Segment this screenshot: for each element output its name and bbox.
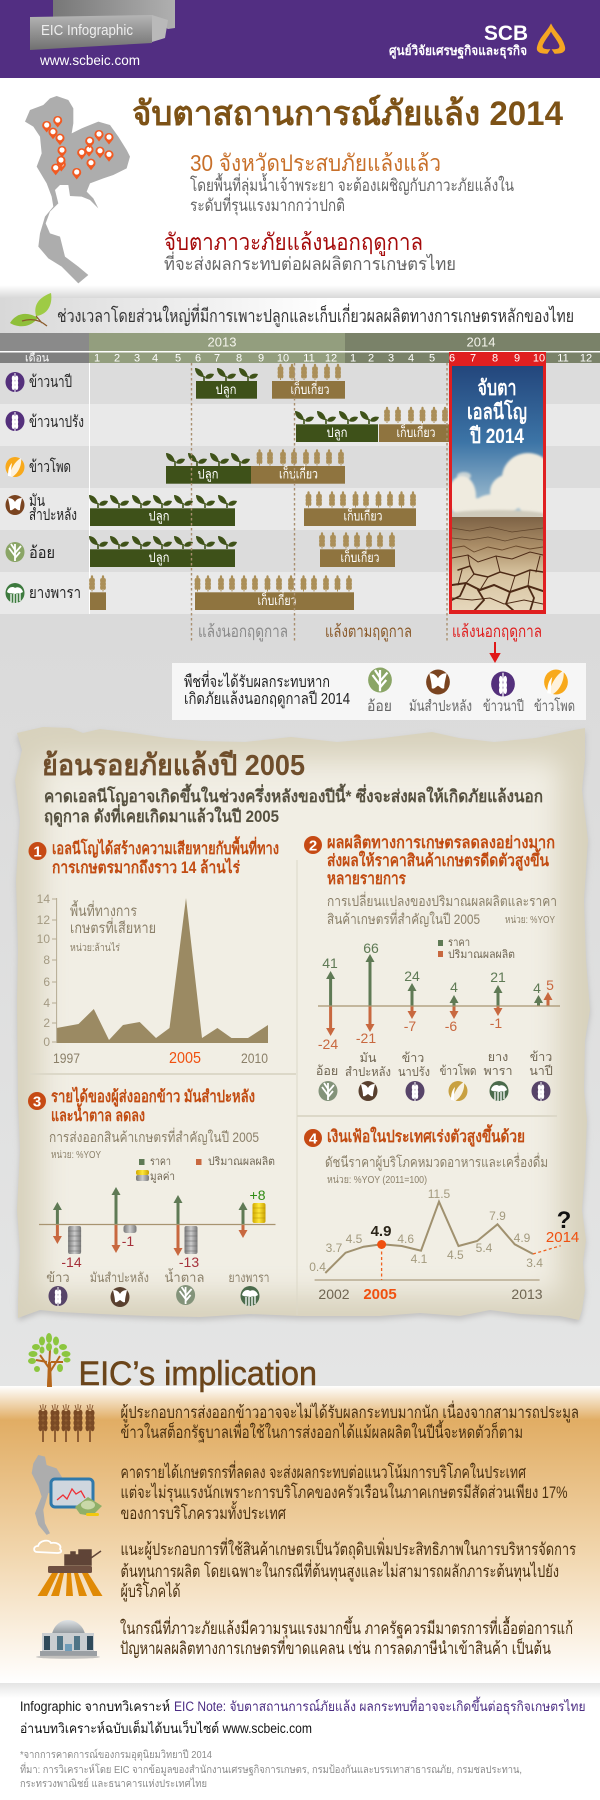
panel 1 heading [52, 836, 279, 877]
panel: El Nino watch photo: ปี 2014 [469, 424, 524, 448]
timeline header: 11 [303, 352, 315, 364]
timeline header: 2 [114, 352, 120, 364]
season labels: แล้งตามฤดูกาล [325, 622, 412, 642]
arrow chart: price and output: -6 [445, 1018, 457, 1034]
panel: El Nino watch photo: 8 [492, 352, 498, 364]
crop calendar: sugar cane: ปลูก [148, 550, 170, 566]
arrow chart: export value: น้ำตาล [165, 1268, 204, 1285]
timeline header: 4 [408, 352, 414, 364]
number badge 4: 4 [309, 1130, 318, 1148]
arrow: down to affected crops [491, 642, 499, 661]
row labels with crop icons: มัน [29, 493, 45, 510]
panel: torn paper 2005 drought [15, 727, 590, 1323]
arrow chart: export value: มันสำปะหลัง [90, 1270, 149, 1285]
intro paragraph [44, 783, 543, 828]
SCB logo text [389, 22, 528, 60]
timeline header: 2014 [467, 334, 495, 350]
footnotes: *จากการคาดการณ์ของกรมอุตุนิยมวิทยาปี 2014 [20, 1748, 212, 1761]
footnotes: กระทรวงพาณิชย์ และธนาคารแห่งประเทศไทย [20, 1777, 207, 1790]
panel 3: exporters income [28, 1086, 276, 1307]
area chart: damaged farmland: 2005 [169, 1050, 201, 1067]
crop calendar: corn: ปลูก [198, 466, 218, 482]
legend: ราคา [448, 937, 470, 949]
timeline header: 3 [388, 352, 394, 364]
arrow chart: price and output: -21 [356, 1030, 376, 1046]
area chart: damaged farmland: 12 [37, 913, 50, 927]
area chart: damaged farmland: 4 [43, 996, 50, 1010]
text [120, 1460, 568, 1523]
timeline header: เดือน [25, 352, 49, 364]
line chart: CPI food: 3.4 [526, 1256, 543, 1270]
arrow chart: price and output: นาปี [529, 1064, 553, 1078]
SCB logo text: ศูนย์วิจัยเศรษฐกิจและธุรกิจ [389, 43, 527, 60]
row labels with crop icons: ข้าวโพด [29, 457, 71, 476]
crop calendar: sugar cane: เก็บเกี่ยว [340, 548, 380, 565]
panel: El Nino watch photo: จับตา [478, 377, 516, 400]
crop calendar: cassava: ปลูก [148, 508, 170, 524]
area chart: damaged farmland: 0 [43, 1035, 50, 1049]
row labels with crop icons: ข้าวนาปรัง [29, 413, 84, 431]
line chart: CPI food: 2005 [363, 1286, 397, 1303]
crop calendar: rice (main) [195, 364, 345, 399]
area chart: damaged farmland [37, 892, 268, 1067]
footnotes [20, 1748, 522, 1790]
timeline header: 11 [557, 352, 569, 364]
panel 4 heading: เงินเฟ้อในประเทศเร่งตัวสูงขึ้นด้วย [327, 1124, 525, 1148]
legend: มูลค่า [150, 1171, 175, 1183]
legend: ปริมาณผลผลิต [448, 949, 515, 961]
intro text: 30 provinces: ระดับที่รุนแรงมากกว่าปกติ [190, 193, 345, 216]
panel: El Nino watch photo: เอลนีโญ [467, 399, 527, 425]
crop calendar: rice (main): เก็บเกี่ยว [290, 380, 330, 397]
line chart: CPI food: 4.9 [371, 1223, 391, 1240]
section heading banner [0, 293, 600, 333]
panel 4 subtitle: ดัชนีราคาผู้บริโภคหมวดอาหารและเครื่องดื่ม [325, 1153, 548, 1171]
page background below calendar [0, 614, 600, 1386]
panel: El Nino watch photo [449, 352, 546, 614]
area chart: damaged farmland: เกษตรที่เสียหาย [70, 917, 156, 937]
panel 2: output fell, prices rose [304, 833, 560, 1101]
panel 4 subtitle: หน่วย: %YOY (2011=100) [327, 1175, 427, 1186]
line chart: CPI food: 4.6 [397, 1232, 414, 1246]
callout: affected crops: เกิดภัยแล้งนอกฤดูกาลปี 2014 [184, 690, 350, 709]
crop calendar: rubber: เก็บเกี่ยว [258, 591, 296, 608]
line chart: CPI food: ? [557, 1207, 571, 1234]
line chart: CPI food: 0.4 [309, 1260, 326, 1274]
panel 4 subtitle [325, 1153, 548, 1186]
panel 2 subtitle [327, 892, 557, 927]
timeline header: 3 [134, 352, 140, 364]
row labels with crop icons: สำปะหลัง [29, 507, 77, 524]
arrow chart: export value: +8 [250, 1187, 266, 1203]
line chart: CPI food: 2002 [318, 1286, 350, 1302]
arrow chart: price and output: 4 [450, 979, 458, 995]
arrow chart: price and output: ยาง [488, 1050, 508, 1064]
heading: EIC's implication: EIC’s implication [78, 1355, 317, 1393]
panel 2 subtitle: การเปลี่ยนแปลงของปริมาณผลผลิตและราคา [327, 892, 557, 909]
implication 2 [32, 1455, 567, 1535]
header bar [0, 0, 600, 78]
icon: SCB lotus [538, 25, 564, 53]
crop calendar: corn: เก็บเกี่ยว [279, 464, 318, 482]
timeline header: 10 [277, 352, 289, 364]
panel: El Nino watch photo: 7 [470, 352, 476, 364]
implication 3 [34, 1537, 576, 1602]
arrow chart: export value: -1 [122, 1233, 134, 1249]
crop row stripes [0, 363, 600, 614]
implication 4 [36, 1616, 573, 1659]
area chart: damaged farmland: 14 [37, 892, 50, 906]
timeline header: 9 [258, 352, 264, 364]
text: ผู้บริโภคได้ [120, 1581, 180, 1602]
crop calendar: corn [166, 449, 345, 484]
timeline header: 1 [350, 352, 356, 364]
title: จับตาสถานการณ์ภัยแล้ง 2014 [132, 94, 563, 133]
callout: affected crops: มันสำปะหลัง [409, 698, 472, 715]
crop calendar: off-season rice: ปลูก [326, 425, 348, 441]
season labels [198, 622, 542, 642]
intro text: off-season drought [164, 229, 456, 274]
line chart: CPI food: 4.5 [346, 1232, 363, 1246]
row labels with crop icons: ข้าวนาปี [29, 373, 72, 391]
panel 4: inflation [304, 1124, 579, 1303]
row labels with crop icons [6, 372, 84, 603]
callout: affected crops [172, 663, 586, 720]
callout: affected crops: ข้าวโพด [534, 697, 575, 715]
area chart: damaged farmland: 2010 [241, 1051, 268, 1066]
panel 3 subtitle: การส่งออกสินค้าเกษตรที่สำคัญในปี 2005 [49, 1128, 259, 1145]
icon: map, chart and money [32, 1455, 102, 1535]
panel 3 heading: รายได้ของผู้ส่งออกข้าว มันสำปะหลัง [51, 1086, 255, 1108]
legend: ราคา [150, 1156, 171, 1168]
season labels: แล้งนอกฤดูกาล [452, 622, 542, 642]
season labels: แล้งนอกฤดูกาล [198, 622, 288, 642]
line chart: CPI food: 5.4 [476, 1241, 493, 1255]
number badge 4 [304, 1129, 322, 1148]
timeline header: 5 [429, 352, 435, 364]
timeline header: 4 [152, 352, 158, 364]
timeline header: 5 [175, 352, 181, 364]
number badge 2: 2 [309, 838, 317, 854]
legend [136, 1156, 275, 1183]
line chart: CPI food [309, 1187, 579, 1303]
source line: Infographic จากบทวิเคราะห์ [20, 1698, 170, 1714]
number badge 3 [28, 1092, 46, 1110]
line chart: CPI food: 4.5 [447, 1248, 464, 1262]
crop calendar: sugar cane [89, 532, 395, 567]
season divider lines [192, 363, 447, 642]
panel 2 heading: ผลผลิตทางการเกษตรลดลงอย่างมาก [327, 833, 555, 852]
intro paragraph: ฤดูกาล ดังที่เคยเกิดมาแล้วในปี 2005 [44, 804, 279, 828]
line chart: CPI food: 4.9 [514, 1231, 531, 1245]
callout: affected crops: ข้าวนาปี [483, 698, 524, 715]
area chart: damaged farmland: 2 [43, 1016, 50, 1030]
source line [20, 1696, 586, 1736]
arrow chart: price and output: 66 [363, 940, 379, 956]
arrow chart: price and output: 4 [533, 980, 541, 996]
crop calendar: off-season rice: เก็บเกี่ยว [396, 423, 436, 440]
panel: El Nino watch photo: 10 [533, 352, 545, 364]
EIC implication band [0, 1386, 600, 1683]
intro text: off-season drought: จับตาภาวะภัยแล้งนอกฤดูกาล [164, 229, 423, 256]
panel 2 heading [327, 833, 555, 888]
line chart: CPI food: 2014 [546, 1229, 579, 1246]
panel 3 subtitle: หน่วย: %YOY [51, 1150, 101, 1161]
panel 3 subtitle [49, 1128, 259, 1161]
callout: affected crops: อ้อย [367, 698, 392, 715]
heading: tracing the 2005 drought: ย้อนรอยภัยแล้งปี 2005 [42, 750, 305, 782]
timeline header: 7 [214, 352, 220, 364]
line chart: CPI food: 4.1 [411, 1252, 428, 1266]
row labels with crop icons: อ้อย [29, 544, 55, 562]
arrow chart: price and output: พารา [484, 1064, 512, 1078]
timeline header: 2013 [208, 334, 236, 350]
intro text: off-season drought: ที่จะส่งผลกระทบต่อผลผลิตการเกษตรไทย [164, 251, 456, 274]
footnotes: ที่มา: การวิเคราะห์โดย EIC จากข้อมูลของสำนักงานเศรษฐกิจการเกษตร, กรมป้องกันและบรรเทาสาธารณภัย, กรมชลประทาน, [20, 1762, 522, 1776]
arrow chart: price and output: อ้อย [316, 1064, 338, 1078]
number badge 2 [304, 836, 322, 854]
intro text: 30 provinces: 30 จังหวัดประสบภัยแล้งแล้ว [190, 150, 441, 176]
timeline header: 1 [94, 352, 100, 364]
row labels with crop icons: ยางพารา [29, 585, 81, 602]
text: ของการบริโภครวมทั้งประเทศ [120, 1501, 286, 1523]
icon: leaves [10, 293, 51, 326]
legend: ปริมาณผลผลิต [208, 1156, 275, 1168]
line chart: CPI food: 7.9 [489, 1209, 506, 1223]
source line: อ่านบทวิเคราะห์ฉบับเต็มได้บนเว็บไซต์ www.scbeic.com [20, 1719, 312, 1736]
area chart: damaged farmland: หน่วย:ล้านไร่ [70, 942, 121, 954]
line chart: CPI food: 11.5 [428, 1187, 451, 1201]
timeline header: 12 [580, 352, 592, 364]
text [120, 1616, 573, 1658]
legend [438, 937, 515, 961]
arrow chart: price and output: สำปะหลัง [345, 1065, 391, 1079]
arrow chart: export value: ข้าว [46, 1270, 70, 1285]
arrow chart: price and output: ข้าว [530, 1050, 552, 1064]
crop calendar: cassava [89, 491, 416, 526]
number badge 1 [28, 842, 46, 860]
ribbon: EIC Infographic [30, 0, 175, 50]
arrow chart: price and output: นาปรัง [398, 1065, 430, 1079]
callout: affected crops: พืชที่จะได้รับผลกระทบหาก [184, 670, 330, 691]
arrow chart: export value: -14 [61, 1254, 82, 1270]
icon: harvester on field [34, 1541, 102, 1596]
timeline header [0, 333, 600, 364]
panel 2 heading: ส่งผลให้ราคาสินค้าเกษตรดีดตัวสูงขึ้น [327, 848, 550, 872]
arrow chart: price and output: 24 [404, 968, 420, 984]
SCB logo text: SCB [484, 22, 528, 45]
arrow chart: price and output: มัน [360, 1051, 377, 1065]
number badge 3: 3 [33, 1094, 41, 1110]
icon: government building [36, 1620, 100, 1659]
panel 2 subtitle: หน่วย: %YOY [505, 915, 555, 926]
panel: El Nino watch photo: 9 [514, 352, 520, 364]
arrow chart: export value [39, 1187, 276, 1307]
map of Thailand with drought pins [25, 96, 130, 283]
text [120, 1537, 576, 1602]
panel 2 subtitle: สินค้าเกษตรที่สำคัญในปี 2005 [327, 910, 480, 927]
intro text: 30 provinces [190, 150, 514, 216]
panel 3 heading [51, 1086, 255, 1125]
panel 1 heading: เอลนีโญได้สร้างความเสียหายกับพื้นที่ทาง [52, 836, 279, 859]
arrow chart: price and output: -1 [490, 1015, 502, 1031]
arrow chart: price and output: ข้าวโพด [440, 1063, 476, 1078]
area chart: damaged farmland: 10 [37, 932, 50, 946]
text [120, 1400, 579, 1443]
panel: El Nino watch photo: 6 [449, 352, 455, 364]
area chart: damaged farmland: 1997 [53, 1051, 80, 1066]
arrow chart: price and output [316, 940, 560, 1101]
timeline header: 2 [368, 352, 374, 364]
arrow chart: export value: -13 [179, 1254, 199, 1270]
crop calendar: off-season rice [295, 407, 449, 442]
line chart: CPI food: 3.7 [326, 1241, 343, 1255]
timeline header: 6 [195, 352, 201, 364]
grey fade below intro [0, 285, 600, 298]
icon: wheat ears [38, 1404, 94, 1442]
arrow chart: price and output: -24 [318, 1036, 338, 1052]
timeline header: 12 [325, 352, 337, 364]
area chart: damaged farmland: 8 [43, 953, 50, 967]
panel 1 heading: การเกษตรมากถึงราว 14 ล้านไร่ [52, 857, 240, 877]
crop calendar: rice (main): ปลูก [216, 382, 236, 398]
number badge 1: 1 [33, 844, 42, 860]
arrow chart: export value: ยางพารา [228, 1270, 270, 1285]
intro paragraph: คาดเอลนีโญอาจเกิดขึ้นในช่วงครึ่งหลังของปีนี้* ซึ่งจะส่งผลให้เกิดภัยแล้งนอก [44, 783, 543, 807]
panel 2 heading: หลายรายการ [327, 870, 406, 888]
arrow chart: price and output: -7 [404, 1018, 416, 1034]
panel 3 heading: และน้ำตาล ลดลง [51, 1103, 145, 1125]
icon: tree [28, 1333, 70, 1387]
area chart: damaged farmland: 6 [43, 975, 50, 989]
crop calendar: rubber [89, 575, 354, 610]
arrow chart: price and output: 21 [490, 969, 506, 985]
ribbon: EIC Infographic: EIC Infographic [41, 22, 133, 39]
website url: www.scbeic.com [39, 52, 140, 68]
area chart: damaged farmland: พื้นที่ทางการ [70, 900, 137, 920]
crop calendar: cassava: เก็บเกี่ยว [344, 506, 382, 524]
arrow chart: price and output: ข้าว [402, 1051, 424, 1065]
arrow chart: price and output: 41 [322, 955, 338, 971]
arrow chart: price and output: 5 [546, 977, 554, 993]
timeline header: 8 [236, 352, 242, 364]
implication 1 [38, 1400, 579, 1443]
line chart: CPI food: 2013 [511, 1286, 543, 1302]
intro text: 30 provinces: โดยพื้นที่ลุ่มน้ำเจ้าพระยา จะต้องเผชิญกับภาวะภัยแล้งใน [190, 173, 514, 196]
panel 1: El Nino damage [28, 836, 279, 1067]
footer shadow [0, 1683, 600, 1698]
